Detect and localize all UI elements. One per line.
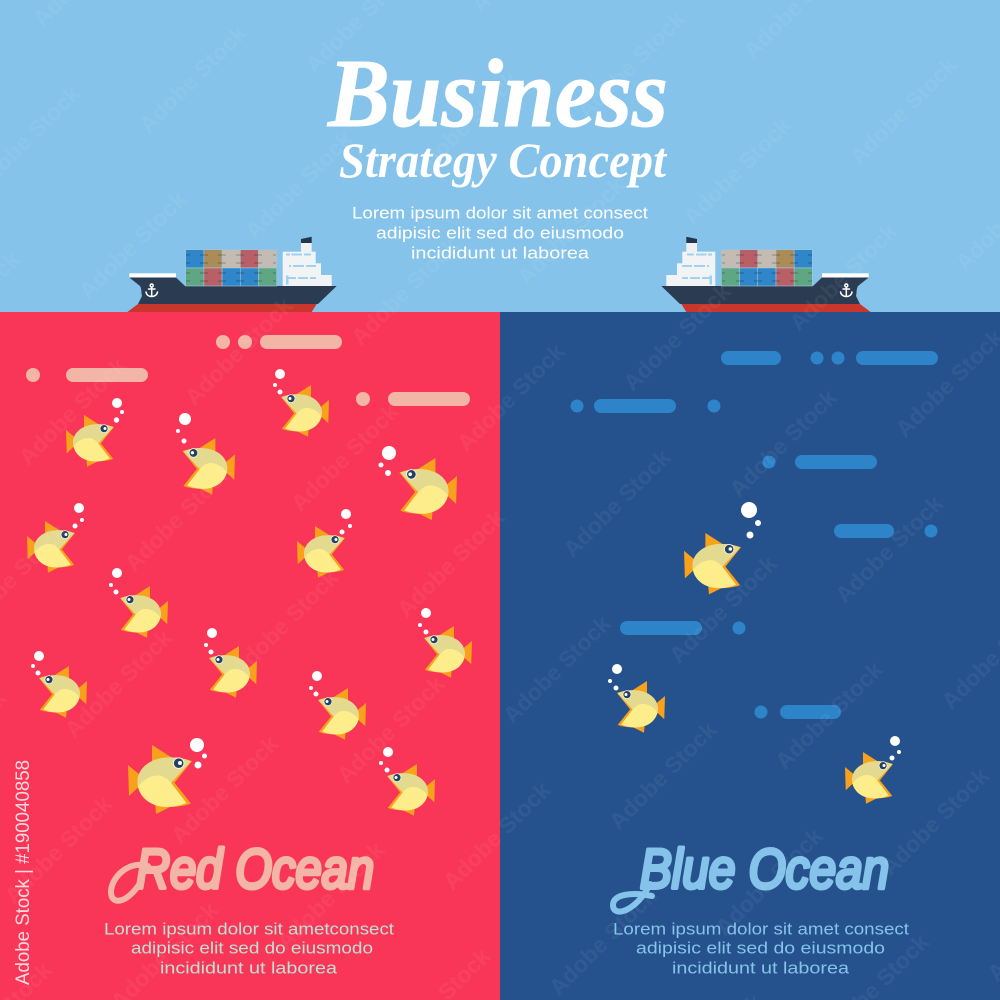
red ocean fish 8 [418, 608, 472, 678]
text block: intro [352, 204, 648, 262]
text block: red ocean [104, 920, 394, 978]
title: Business: Business [327, 40, 668, 148]
red ocean fish 2 [176, 413, 235, 495]
blue ocean fish small left [608, 664, 665, 733]
heading: Red Ocean: Red Ocean [136, 837, 374, 900]
text block: blue ocean: incididunt ut laborea [672, 958, 850, 978]
text block: blue ocean [613, 920, 909, 978]
red ocean fish 5 [27, 503, 84, 573]
panel: sky background [0, 0, 1000, 312]
red ocean fish 1 [66, 398, 124, 467]
ship: blue ocean container ship [661, 237, 871, 312]
panel: blue ocean [500, 312, 1000, 1000]
red ocean fish 10 [31, 651, 87, 718]
red ocean fish 7 [109, 568, 168, 638]
text block: red ocean: Lorem ipsum dolor sit ametconsect [104, 920, 394, 938]
heading: Blue Ocean [613, 837, 889, 912]
text block: blue ocean: Lorem ipsum dolor sit amet consect [613, 920, 909, 938]
subtitle: Strategy Concept: Strategy Concept [339, 132, 668, 188]
text block: red ocean: incididunt ut laborea [160, 958, 338, 978]
blue ocean wave dashes [570, 351, 938, 719]
text block: blue ocean: adipisic elit sed do eiusmodo [636, 938, 885, 958]
red ocean fish 6 [297, 509, 352, 578]
blue ocean fish small right [845, 736, 901, 804]
red ocean wave dashes [26, 335, 470, 406]
red ocean fish 9 [204, 628, 257, 698]
text block: intro: incididunt ut laborea [411, 244, 590, 262]
ship: red ocean container ship [127, 237, 337, 312]
red ocean fish 12 large [128, 738, 207, 814]
red ocean fish 11 [309, 671, 366, 740]
red ocean fish 4 [378, 446, 457, 520]
blue ocean fish large [684, 502, 761, 594]
stock image id: Adobe Stock | #190040858 [13, 760, 34, 985]
text block: red ocean: adipisic elit sed do eiusmodo [131, 938, 373, 958]
heading: Blue Ocean: Blue Ocean [640, 837, 889, 900]
red ocean fish 13 [379, 747, 435, 816]
red ocean fish 3 [273, 369, 329, 437]
text block: intro: Lorem ipsum dolor sit amet consect [352, 204, 648, 222]
panel: red ocean [0, 312, 500, 1000]
text block: intro: adipisic elit sed do eiusmodo [376, 224, 624, 242]
